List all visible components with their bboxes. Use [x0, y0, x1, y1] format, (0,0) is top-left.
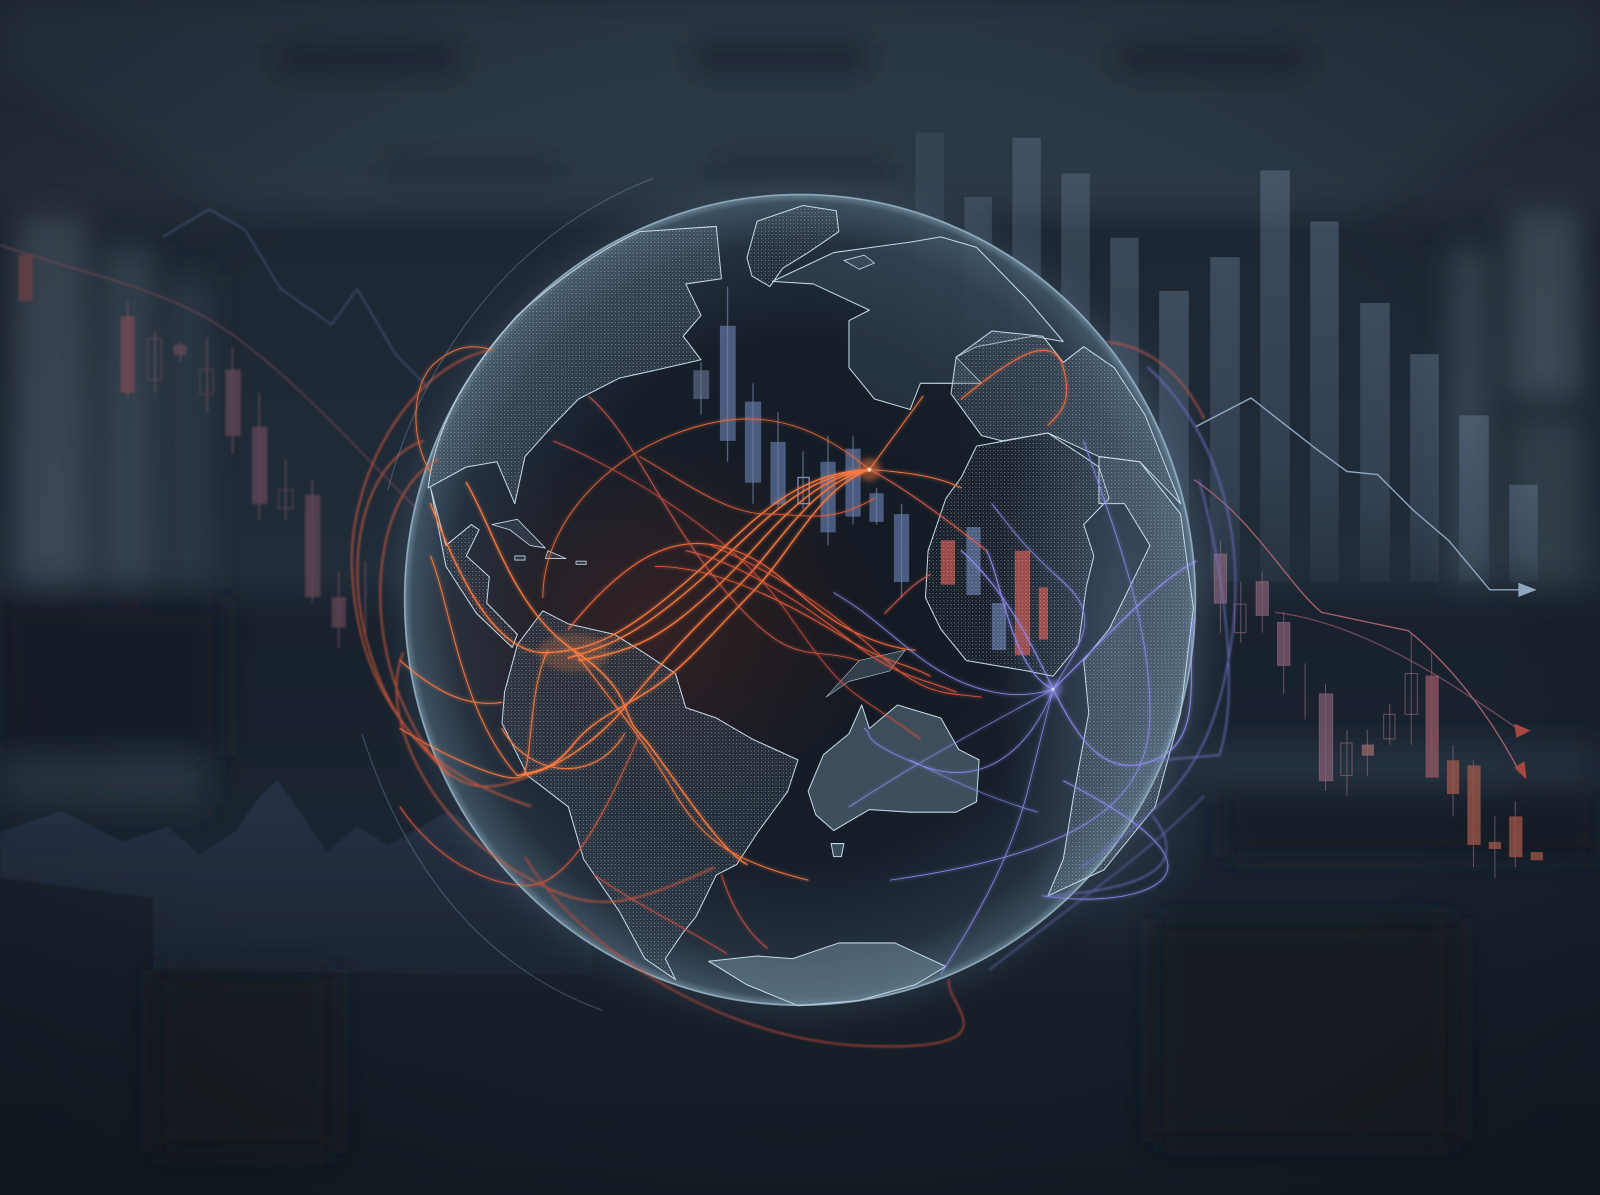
continent: Australia: [808, 705, 979, 830]
continents: [428, 206, 1193, 1006]
continent: north dots: [428, 226, 721, 504]
line chart: falling red trend with arrows, right: [1194, 480, 1531, 780]
continent: island arc: [826, 650, 905, 697]
continent: South America dots: [502, 611, 798, 980]
continent: north: [428, 226, 721, 504]
candlesticks seen through the globe: [693, 287, 1048, 655]
continent: central: [926, 433, 1109, 676]
bar chart: right background: [915, 133, 1538, 582]
candlestick chart: right: [1214, 541, 1543, 878]
purple orbit arcs: [990, 367, 1235, 969]
continent: far right dots: [1048, 457, 1193, 896]
pale orbit rings: [362, 179, 653, 1010]
line chart: falling trends, left: [0, 209, 429, 510]
continent: upper right dots: [951, 331, 1181, 504]
glow behind globe: [396, 188, 1204, 1016]
globe: [400, 194, 1237, 1006]
continent: upper centre: [772, 237, 1063, 409]
orange routes: [400, 347, 1067, 953]
hub sparkles: [538, 458, 1062, 699]
area chart: left background: [0, 781, 592, 975]
continent: small southern island: [831, 844, 844, 857]
islands: [492, 255, 874, 564]
line chart: falling blue trend with arrow, right: [1196, 398, 1537, 597]
orbit routes outside the globe: [352, 179, 1235, 1046]
purple routes: [834, 441, 1196, 974]
continent: arctic island: [747, 206, 839, 287]
continent: far right: [1048, 457, 1193, 896]
warm glow over routes: [415, 300, 1237, 969]
candlestick chart: left: [18, 255, 365, 648]
orange orbit arcs: [352, 342, 1204, 1046]
globe body: [404, 194, 1196, 1006]
globe rim: [405, 195, 1195, 1005]
continent: South America: [502, 611, 798, 980]
continent: upper right: [951, 331, 1181, 504]
continent: Central America: [431, 488, 517, 647]
continent: Antarctica: [709, 943, 946, 1006]
